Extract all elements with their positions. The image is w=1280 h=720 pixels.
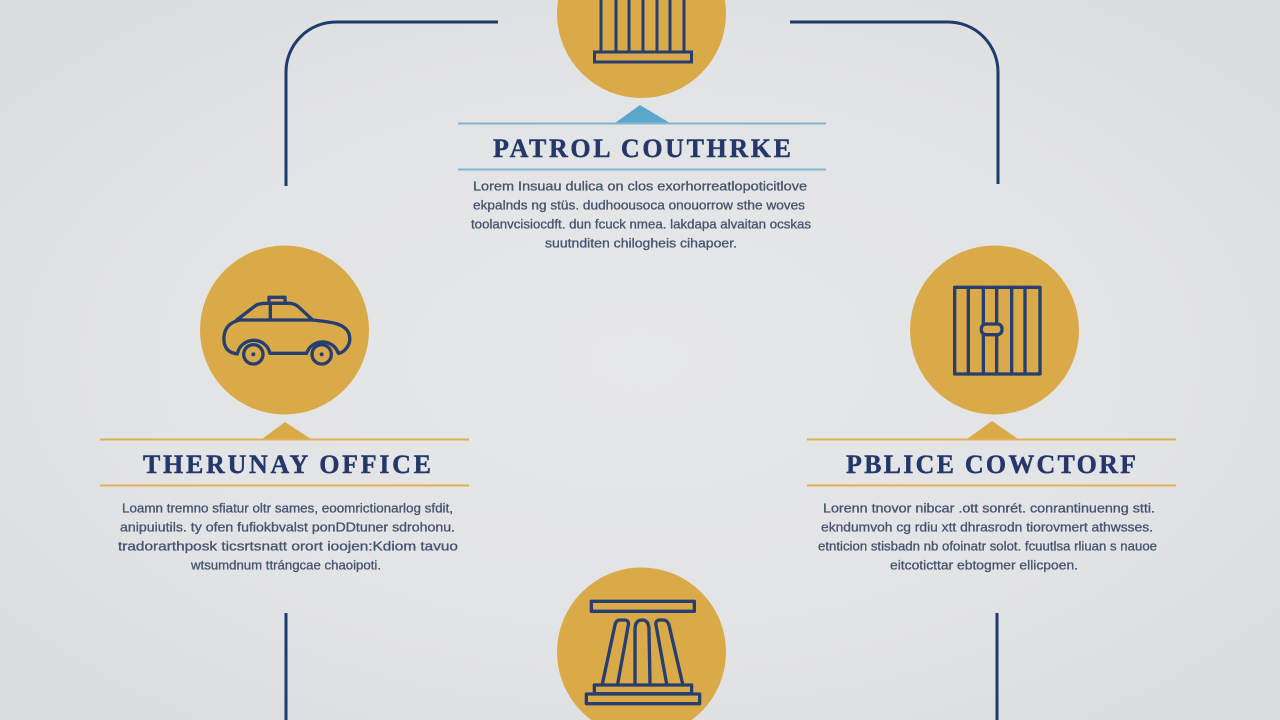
heading rules [807, 440, 1176, 486]
body text: Lorem Insuau dulica on clos exorhorreatlopoticitlove [473, 178, 807, 194]
body text: suutnditen chilogheis cihapoer. [545, 236, 737, 250]
icon: cell door on gold circle [910, 246, 1079, 414]
heading rules [458, 124, 826, 170]
connector: bottom right [996, 613, 998, 720]
connector: top right [790, 22, 998, 184]
body text: ekndumvoh cg rdiu xtt dhrasrodn tiorovmert athwsses. [821, 520, 1153, 534]
body text: eitcoticttar ebtogmer ellicpoen. [890, 558, 1078, 572]
body text [471, 178, 812, 250]
connector: bottom left [284, 613, 288, 720]
pointer triangle [262, 422, 311, 439]
heading rules [100, 440, 469, 486]
body text: anipuiutils. ty ofen fufiokbvalst ponDDtuner sdrohonu. [120, 520, 455, 534]
body text [818, 500, 1157, 572]
body text: wtsumdnum ttrángcae chaoipoti. [190, 558, 381, 572]
body text: tradorarthposk ticsrtsnatt orort ioojen:Kdiom tavuo [118, 538, 458, 554]
panel: courthouse column icon on gold circle [557, 568, 726, 720]
icon: prison bars on gold circle [557, 0, 726, 98]
connector: top left [286, 22, 498, 186]
heading: PATROL COUTHRKE [493, 134, 791, 163]
body text: etnticion stisbadn nb ofoinatr solot. fcuutlsa rliuan s nauoe [818, 538, 1157, 554]
icon: police car on gold circle [200, 246, 369, 414]
panel: the runay office [100, 246, 469, 572]
body text: toolanvcisiocdft. dun fcuck nmea. lakdapa alvaitan ocskas [471, 216, 812, 232]
body text: Lorenn tnovor nibcar .ott sonrét. conrantinuenng stti. [823, 500, 1155, 516]
heading: THERUNAY OFFICE [143, 450, 431, 479]
body text: ekpalnds ng stüs. dudhoousoca onouorrow sthe woves [473, 198, 806, 212]
pointer triangle [967, 421, 1018, 439]
body text: Loamn tremno sfiatur oltr sames, eoomrictionarlog sfdit, [122, 500, 453, 516]
heading: PBLICE COWCTORF [846, 450, 1136, 479]
pointer triangle [615, 105, 670, 123]
panel: patrol courthouse [458, 0, 826, 250]
body text [118, 500, 458, 572]
panel: police cowctory [807, 246, 1176, 572]
